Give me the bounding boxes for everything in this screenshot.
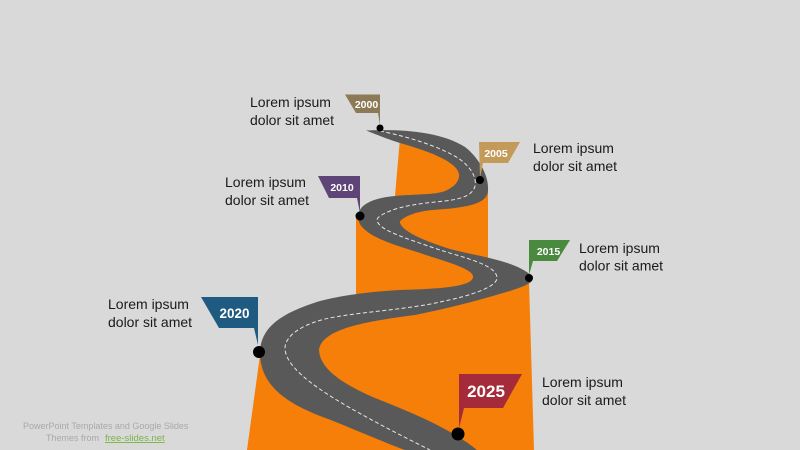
text: 2005 description: Lorem ipsum — [533, 140, 614, 156]
year label: 2010: 2010 — [330, 182, 354, 194]
text: 2000 description: dolor sit amet — [250, 112, 334, 128]
year label: 2000: 2000 — [355, 99, 378, 111]
milestone 2005 — [476, 140, 617, 184]
marker dot: 2005 — [476, 176, 484, 184]
flag: 2015 — [529, 240, 570, 275]
year label: 2020: 2020 — [219, 306, 250, 321]
milestone 2015 — [525, 240, 663, 282]
marker dot: 2015 — [525, 274, 533, 282]
text: 2025 description: Lorem ipsum — [542, 374, 623, 390]
marker dot: 2010 — [356, 212, 364, 220]
year label: 2025: 2025 — [467, 382, 505, 401]
flag: 2000 — [345, 94, 380, 125]
year label: 2015: 2015 — [537, 246, 560, 258]
text: 2010 description: dolor sit amet — [225, 192, 309, 208]
text: 2020 description: Lorem ipsum — [108, 296, 189, 312]
flag: 2010 — [318, 176, 360, 213]
text: 2015 description: dolor sit amet — [579, 258, 663, 274]
footer credit: free-slides.net — [105, 433, 165, 444]
milestone 2020 — [108, 296, 265, 358]
flag: 2005 — [479, 142, 520, 178]
marker dot: 2025 — [452, 428, 464, 440]
marker dot: 2000 — [376, 124, 384, 132]
footer credit: Themes from — [46, 433, 102, 443]
orange hill — [247, 138, 534, 450]
text: 2005 description: dolor sit amet — [533, 158, 617, 174]
flag: 2025 — [459, 374, 522, 428]
text: 2010 description: Lorem ipsum — [225, 174, 306, 190]
text: 2020 description: dolor sit amet — [108, 314, 192, 330]
marker dot: 2020 — [253, 346, 265, 358]
text: 2000 description: Lorem ipsum — [250, 94, 331, 110]
flag: 2020 — [201, 297, 258, 345]
milestone 2025 — [452, 374, 626, 440]
milestone 2010 — [225, 174, 364, 220]
winding road — [260, 130, 533, 450]
milestone 2000 — [250, 94, 384, 132]
road centre dashed line — [285, 131, 497, 450]
year label: 2005: 2005 — [484, 148, 508, 160]
text: 2025 description: dolor sit amet — [542, 392, 626, 408]
text: 2015 description: Lorem ipsum — [579, 240, 660, 256]
footer credit: PowerPoint Templates and Google Slides — [23, 421, 188, 431]
